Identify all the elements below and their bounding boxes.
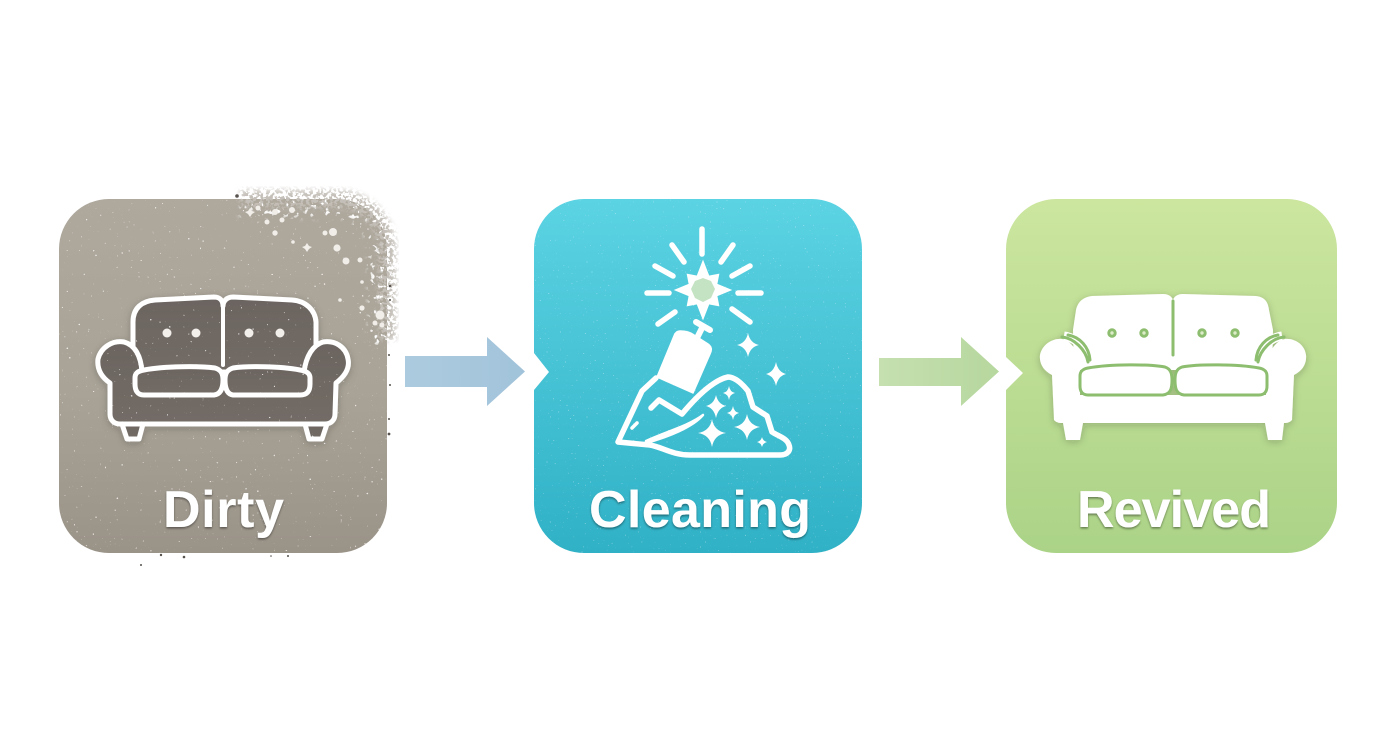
star bbox=[677, 263, 729, 317]
burst rays bbox=[647, 229, 761, 324]
arrow: cleaning to revived bbox=[879, 337, 999, 406]
label: Revived: Revived bbox=[1077, 481, 1271, 539]
sparkles bbox=[698, 333, 786, 447]
arrow: dirty to cleaning bbox=[405, 337, 525, 406]
icon: clean sofa bbox=[1040, 294, 1306, 440]
icon: spray bottle with sparkles bbox=[618, 229, 790, 455]
dust cloud: top right corner bbox=[140, 186, 399, 566]
bottle bbox=[657, 331, 711, 393]
panel: dirty bbox=[59, 186, 399, 566]
icon: dirty sofa bbox=[98, 297, 348, 439]
label: Dirty: Dirty bbox=[163, 481, 284, 539]
panel: cleaning bbox=[534, 199, 862, 553]
panel: revived bbox=[1006, 199, 1337, 553]
label: Cleaning: Cleaning bbox=[589, 481, 811, 539]
dust pile outline bbox=[618, 377, 790, 455]
